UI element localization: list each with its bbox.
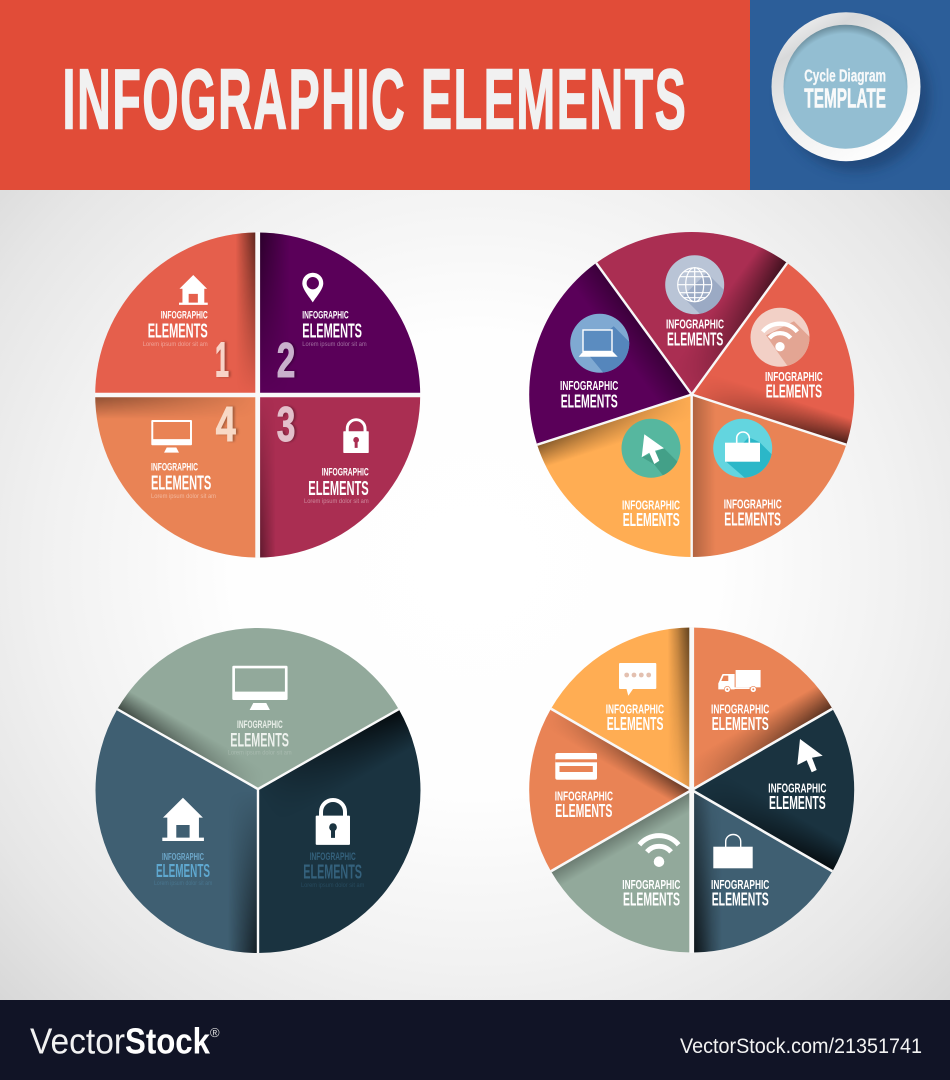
- segment 2 text: Lorem ipsum dolor sit am: [302, 341, 367, 348]
- icon: credit card: [555, 753, 597, 780]
- segment yellow: [537, 396, 690, 557]
- purple segment text: ELEMENTS: [561, 390, 618, 411]
- orange segment text: ELEMENTS: [724, 509, 781, 530]
- slate segment text: Lorem ipsum dolor sit am: [154, 880, 212, 887]
- yellow segment text: ELEMENTS: [607, 713, 663, 734]
- slate segment text: [154, 852, 212, 887]
- badge text: [804, 66, 886, 113]
- crimson segment text: INFOGRAPHIC: [666, 317, 724, 332]
- segment 1: [95, 232, 258, 395]
- badge text: TEMPLATE: [804, 82, 886, 113]
- icon: padlock: [343, 420, 369, 453]
- number 2: 2: [277, 334, 295, 388]
- yellow segment text: INFOGRAPHIC: [606, 701, 664, 716]
- segment 2: [258, 232, 421, 395]
- number 3: 3: [277, 398, 295, 452]
- pie chart: four segments: [95, 232, 421, 558]
- slate segment text: INFOGRAPHIC: [711, 877, 770, 892]
- footer logo: [30, 1020, 220, 1061]
- segment dark navy: [259, 709, 420, 953]
- segment 1 text: [143, 310, 208, 348]
- segment 2 text: INFOGRAPHIC: [302, 310, 349, 322]
- header banner: [0, 0, 750, 190]
- orange top segment text: [711, 701, 770, 734]
- segment 4 text: Lorem ipsum dolor sit am: [151, 493, 216, 500]
- icon: wifi: [639, 836, 679, 867]
- footer logo: Stock: [125, 1020, 211, 1061]
- crimson segment text: ELEMENTS: [667, 329, 723, 350]
- navy segment text: [301, 851, 364, 889]
- red segment text: [765, 369, 823, 402]
- number 4: 4: [216, 398, 236, 452]
- red segment text: INFOGRAPHIC: [765, 369, 823, 384]
- segment 4 text: [151, 462, 216, 500]
- footer bar: [0, 1000, 950, 1080]
- slate segment text: [711, 877, 770, 910]
- orange top segment text: ELEMENTS: [712, 713, 769, 734]
- yellow segment text: [606, 701, 664, 734]
- segment sage: [551, 792, 690, 952]
- sage segment text: INFOGRAPHIC: [237, 719, 283, 731]
- segment purple: [529, 263, 690, 444]
- icon: laptop: [570, 314, 630, 373]
- segment orange: [692, 396, 846, 557]
- segment orange top right: [694, 628, 832, 788]
- yellow segment text: INFOGRAPHIC: [622, 497, 680, 512]
- badge panel: cycle diagram template: [750, 0, 950, 190]
- segment 3 text: INFOGRAPHIC: [322, 467, 369, 479]
- segment 3 text: ELEMENTS: [308, 478, 369, 500]
- segment 3: [258, 395, 421, 558]
- icon: shopping bag: [713, 835, 753, 868]
- orange segment text: INFOGRAPHIC: [724, 497, 782, 512]
- purple segment text: INFOGRAPHIC: [560, 378, 619, 393]
- segment 3 text: Lorem ipsum dolor sit am: [304, 498, 369, 505]
- icon: house: [179, 275, 208, 305]
- segment 4 text: INFOGRAPHIC: [151, 462, 198, 474]
- footer logo: ®: [210, 1025, 220, 1040]
- pie chart: three segments: [96, 628, 420, 953]
- navy segment text: INFOGRAPHIC: [310, 851, 356, 863]
- red segment text: ELEMENTS: [766, 381, 822, 402]
- orange segment text: [724, 497, 782, 530]
- icon: speech bubble: [619, 663, 656, 696]
- orange left segment text: INFOGRAPHIC: [555, 789, 613, 804]
- icon: house: [162, 798, 204, 841]
- segment orange left: [529, 708, 689, 872]
- segment slate: [96, 709, 257, 953]
- segment crimson: [596, 232, 788, 392]
- sage segment text: ELEMENTS: [230, 729, 289, 751]
- icon: monitor: [151, 420, 192, 453]
- sage segment text: [228, 719, 292, 756]
- yellow segment text: [622, 497, 680, 530]
- purple segment text: [560, 378, 619, 411]
- segment yellow: [551, 628, 690, 788]
- icon: cursor: [622, 418, 680, 478]
- icon: shopping bag: [713, 418, 772, 478]
- crimson segment text: [666, 317, 724, 350]
- orange left segment text: [555, 789, 613, 821]
- segment 1 text: Lorem ipsum dolor sit am: [143, 341, 208, 348]
- slate segment text: INFOGRAPHIC: [162, 852, 204, 863]
- number 1: 1: [215, 334, 229, 388]
- sage segment text: Lorem ipsum dolor sit am: [228, 750, 292, 756]
- footer logo: Vector: [30, 1020, 125, 1061]
- footer url: VectorStock.com/21351741: [680, 1035, 922, 1058]
- icon: wifi: [750, 308, 810, 367]
- segment red: [694, 263, 854, 445]
- icon: padlock: [316, 800, 350, 845]
- pie chart: five segments: [529, 232, 854, 557]
- segment sage: [118, 628, 399, 790]
- yellow segment text: ELEMENTS: [623, 509, 680, 530]
- segment 2 text: [302, 310, 367, 348]
- segment slate: [694, 792, 832, 952]
- navy segment text: [768, 780, 827, 813]
- segment 4 text: ELEMENTS: [151, 472, 211, 494]
- segment 1 text: INFOGRAPHIC: [161, 310, 208, 322]
- icon: map pin: [302, 273, 323, 302]
- icon: monitor: [232, 666, 288, 710]
- navy segment text: ELEMENTS: [769, 792, 826, 813]
- sage segment text: INFOGRAPHIC: [622, 877, 681, 892]
- navy segment text: Lorem ipsum dolor sit am: [301, 882, 364, 889]
- pie chart: six segments: [529, 628, 854, 953]
- icon: globe: [665, 255, 724, 314]
- sage segment text: [622, 877, 681, 910]
- navy segment text: INFOGRAPHIC: [768, 780, 827, 795]
- segment 1 text: ELEMENTS: [148, 321, 208, 343]
- orange top segment text: INFOGRAPHIC: [711, 701, 770, 716]
- badge text: Cycle Diagram: [804, 66, 886, 86]
- segment navy: [694, 709, 854, 872]
- slate segment text: ELEMENTS: [712, 889, 769, 910]
- icon: delivery truck: [718, 670, 761, 693]
- orange left segment text: ELEMENTS: [555, 800, 612, 821]
- slate segment text: ELEMENTS: [156, 861, 210, 881]
- page background: [0, 190, 950, 1000]
- segment 4: [95, 395, 258, 558]
- icon: cursor: [797, 739, 823, 772]
- segment 2 text: ELEMENTS: [302, 321, 362, 343]
- segment 3 text: [304, 467, 369, 505]
- sage segment text: ELEMENTS: [623, 889, 680, 910]
- navy segment text: ELEMENTS: [303, 861, 362, 883]
